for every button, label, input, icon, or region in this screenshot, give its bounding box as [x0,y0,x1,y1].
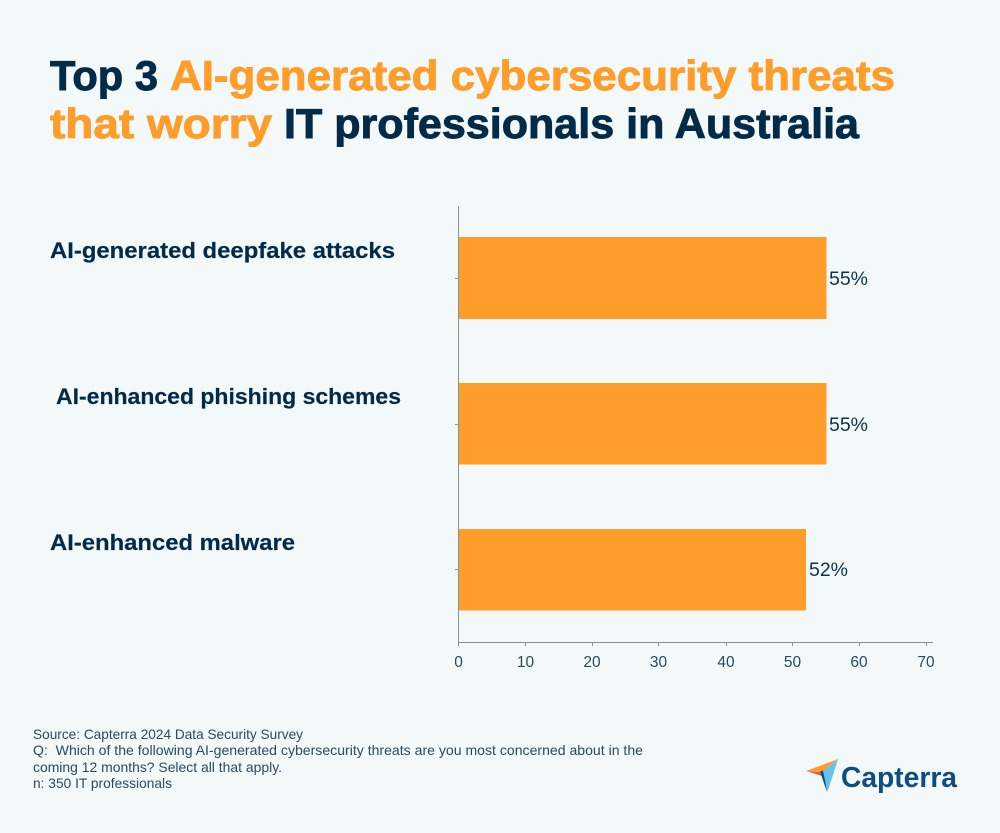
icon: Capterra arrow [806,759,838,792]
title: Top 3 [50,52,158,99]
bars [459,237,826,610]
axis tick labels: 60 [850,654,868,671]
axis tick labels: 20 [583,654,601,671]
bar chart [50,206,935,671]
axis tick labels: 30 [650,654,667,671]
value labels: 55% [829,268,868,290]
source note: Q: Which of the following AI-generated cybersecurity threats are you most concerned about in the [33,742,643,758]
category labels: AI-enhanced malware [50,530,295,555]
axis tick labels: 10 [517,654,534,671]
axis tick labels: 40 [717,654,735,671]
category labels: AI-generated deepfake attacks [50,238,395,263]
axis tick labels: 70 [917,654,935,671]
source note: Source: Capterra 2024 Data Security Survey [33,726,303,742]
value labels: 55% [829,414,868,436]
axis tick labels: 0 [454,654,463,671]
title [50,52,895,147]
title: that worry [50,100,273,147]
title: AI-generated cybersecurity threats [170,52,895,99]
category labels: AI-enhanced phishing schemes [56,384,401,409]
source note: coming 12 months? Select all that apply. [33,759,282,775]
wordmark: Capterra [841,762,958,794]
axis tick labels [454,654,935,671]
logo: Capterra [806,759,958,794]
title: IT professionals in Australia [284,100,860,147]
source note: n: 350 IT professionals [33,775,172,791]
value labels: 52% [809,559,848,581]
axis tick labels: 50 [784,654,801,671]
axes [455,206,933,646]
source note [33,726,643,791]
value labels [809,268,868,581]
category labels [50,238,401,555]
